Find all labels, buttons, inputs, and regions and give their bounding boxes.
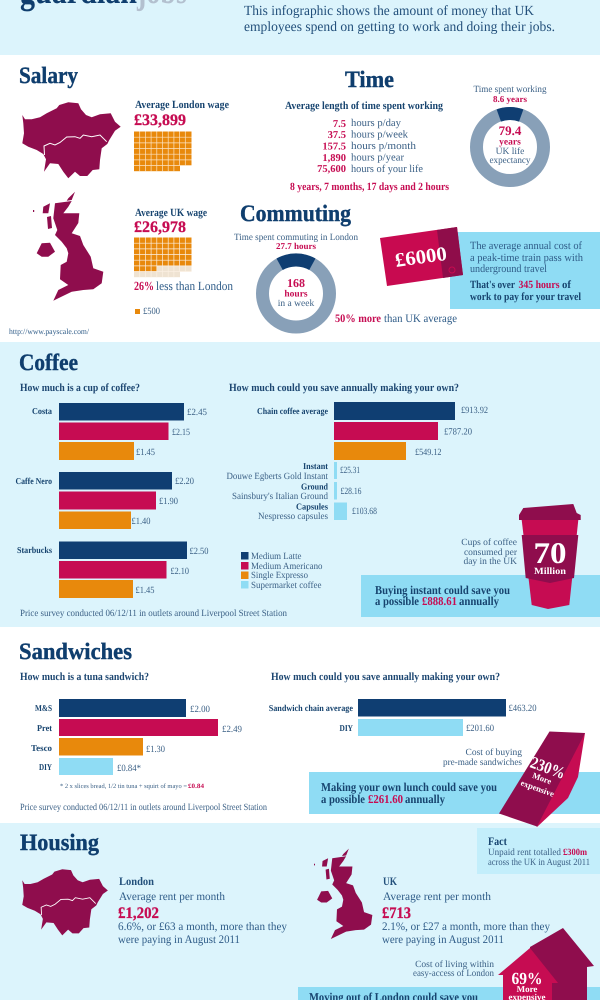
- panel: coffee: [0, 342, 600, 627]
- label: time spent working: [474, 85, 547, 104]
- bar chart: coffee prices: £2.15: [172, 428, 190, 438]
- label: time spent commuting: 27.7 hours: [276, 241, 316, 251]
- bar chart: annual coffee savings: £787.20: [444, 428, 472, 438]
- bar chart: coffee prices: Costa: [32, 406, 52, 416]
- label: cost of living: Cost of living within: [415, 960, 494, 970]
- icon: coffee cup: Million: [534, 567, 567, 577]
- bar chart: sandwich prices: DIY: [39, 762, 52, 772]
- callout: instant saving: a possible: [375, 594, 420, 608]
- label: pre-made sandwiches: Cost of buying: [466, 748, 522, 758]
- source link: http://www.payscale.com/: [9, 327, 90, 336]
- list: working hours: 1,890: [322, 153, 346, 164]
- map: London: [22, 102, 121, 178]
- label: cost of living: easy-access of London: [413, 969, 494, 979]
- bar chart: sandwich prices: M&S: [35, 703, 52, 713]
- bar chart: annual coffee savings: Instant: [303, 461, 328, 471]
- list: working hours: 157.5: [322, 142, 346, 152]
- map: UK rent: [314, 849, 372, 939]
- panel: time: [285, 67, 547, 193]
- callout: train pass cost: a peak-time train pass with: [470, 252, 583, 264]
- bar chart: coffee prices: £2.50: [190, 547, 209, 557]
- bar chart: coffee prices: £2.10: [170, 567, 189, 577]
- text: UK rent: were paying in August 2011: [382, 934, 504, 946]
- bar chart: sandwich prices: £0.84*: [117, 764, 141, 774]
- callout: train pass cost: of: [562, 279, 571, 291]
- bar chart: annual sandwich savings: DIY: [340, 723, 353, 733]
- icon: house: 69%: [512, 969, 542, 988]
- bar chart: annual sandwich savings: [269, 699, 537, 736]
- legend: coffee types: Medium Americano: [251, 562, 323, 572]
- label: time spent commuting: Time spent commuting in London: [234, 233, 358, 243]
- callout: lunch saving: annually: [405, 792, 445, 806]
- bar chart: coffee prices: [16, 403, 209, 598]
- list: working hours: 37.5: [328, 130, 346, 141]
- subheading: Average length of time spent working: [285, 100, 443, 112]
- legend: £500 square: [135, 307, 160, 317]
- bar chart: annual coffee savings: £913.92: [461, 406, 488, 416]
- text: UK rent: UK: [383, 876, 397, 888]
- donut chart: commuting hours: [262, 253, 330, 327]
- total working time: 8 years, 7 months, 17 days and 2 hours: [290, 181, 450, 193]
- bar chart: annual coffee savings: £28.16: [340, 487, 362, 497]
- donut chart: commuting hours: 168: [287, 276, 305, 290]
- heading: sandwiches: Sandwiches: [19, 639, 132, 665]
- text: London rent: [118, 876, 287, 946]
- callout: train pass cost: [450, 232, 600, 309]
- icon: sandwich wedge: [499, 732, 585, 827]
- callout: lunch saving: Making your own lunch could save you: [321, 780, 497, 794]
- callout: instant saving: £888.61: [422, 594, 457, 608]
- label: time spent commuting: [234, 233, 358, 251]
- bar chart: annual sandwich savings: £463.20: [508, 704, 537, 714]
- legend: £500 square: £500: [143, 307, 160, 317]
- text: London rent: Average rent per month: [119, 891, 225, 903]
- list: working hours: hours p/day: [351, 118, 402, 129]
- heading: housing: Housing: [20, 830, 99, 856]
- panel: sandwiches: [19, 639, 600, 814]
- callout: unpaid rent fact: [477, 828, 600, 874]
- callout: instant saving: annually: [459, 594, 499, 608]
- comparison: 50% more: than UK average: [384, 313, 457, 325]
- bar chart: sandwich prices: Pret: [37, 723, 52, 733]
- legend: coffee types: Single Expresso: [251, 571, 308, 581]
- bar chart: coffee prices: £1.90: [159, 497, 178, 507]
- bar chart: coffee prices: Starbucks: [17, 545, 52, 555]
- legend: coffee types: [241, 552, 323, 591]
- text: UK rent: Average rent per month: [383, 891, 491, 903]
- icon: sandwich wedge: expensive: [519, 778, 556, 799]
- legend: coffee types: Supermarket coffee: [251, 581, 322, 591]
- comparison: 26% less than London: less than London: [156, 279, 234, 293]
- callout: train pass cost: underground travel: [470, 263, 547, 275]
- heading: salary: Salary: [19, 63, 78, 89]
- bar chart: annual coffee savings: £25.31: [340, 466, 360, 476]
- callout: unpaid rent fact: Fact: [488, 836, 507, 848]
- text: UK rent: £713: [382, 905, 411, 922]
- figure: London wage: £33,899: [134, 112, 186, 129]
- text: London rent: London: [119, 876, 155, 888]
- note: sandwich price survey: Price survey conducted 06/12/11 in outlets around Liverpool Street Station: [20, 803, 267, 813]
- bar chart: annual coffee savings: Sainsbury's Italian Ground: [232, 492, 328, 502]
- bar chart: sandwich prices: £2.00: [190, 705, 210, 715]
- footnote: DIY sandwich: £0.84: [188, 783, 205, 790]
- label: time spent working: Time spent working: [474, 85, 547, 95]
- list: working hours: hours p/week: [351, 130, 409, 140]
- panel: header: [0, 0, 600, 55]
- bar chart: annual coffee savings: Nespresso capsules: [258, 512, 328, 522]
- intro text: [244, 4, 555, 35]
- bar chart: sandwich prices: Tesco: [31, 743, 52, 753]
- intro text: employees spend on getting to work and doing their jobs.: [244, 20, 555, 35]
- bar chart: annual coffee savings: Ground: [301, 482, 328, 492]
- icon: travel card: £6000: [394, 243, 448, 272]
- callout: lunch saving: a possible: [321, 792, 366, 806]
- bar chart: annual coffee savings: £103.68: [352, 507, 377, 517]
- icon: travel card: [380, 227, 463, 286]
- bar chart: coffee prices: Caffe Nero: [16, 476, 52, 486]
- subheading: sandwich price: How much is a tuna sandwich?: [20, 671, 149, 683]
- bar chart: coffee prices: £2.20: [175, 477, 194, 487]
- list: working hours: hours of your life: [351, 164, 423, 175]
- label: average UK wage: Average UK wage: [135, 207, 207, 219]
- bar chart: coffee prices: £2.45: [187, 408, 207, 418]
- list: working hours: 7.5: [333, 119, 346, 130]
- subheading: sandwich saving: How much could you save annually making your own?: [271, 671, 500, 683]
- donut chart: life expectancy: [476, 107, 544, 180]
- text: London rent: £1,202: [118, 905, 159, 922]
- label: average London wage: Average London wage: [135, 99, 229, 111]
- waffle chart: London wage: [134, 132, 192, 171]
- label: pre-made sandwiches: [443, 748, 522, 768]
- label: pre-made sandwiches: pre-made sandwiches: [443, 758, 522, 768]
- icon: house: [498, 928, 594, 1000]
- callout: train pass cost: The average annual cost of: [470, 240, 582, 252]
- list: working hours: hours p/year: [351, 152, 405, 164]
- panel: housing: [0, 823, 600, 1000]
- heading: time: Time: [345, 67, 394, 93]
- footnote: DIY sandwich: * 2 x slices bread, 1/2 tin tuna + squirt of mayo =: [60, 783, 187, 790]
- bar chart: sandwich prices: £2.49: [222, 725, 242, 735]
- label: cups of coffee: [461, 538, 518, 567]
- donut chart: life expectancy: 79.4: [499, 123, 522, 138]
- intro text: This infographic shows the amount of money that UK: [244, 4, 534, 19]
- subheading: annual saving: How much could you save annually making your own?: [229, 382, 459, 394]
- callout: unpaid rent fact: £300m: [563, 848, 587, 858]
- icon: house: More: [517, 984, 537, 994]
- figure: UK wage: £26,978: [134, 219, 186, 236]
- comparison: 50% more: [335, 313, 457, 325]
- bar chart: annual coffee savings: Douwe Egberts Gold Instant: [226, 472, 328, 482]
- text: UK rent: [382, 876, 550, 946]
- label: cost of living: [413, 960, 494, 979]
- donut chart: commuting hours: in a week: [278, 299, 314, 309]
- bar chart: annual coffee savings: Capsules: [296, 502, 328, 512]
- bar chart: annual coffee savings: £549.12: [415, 448, 442, 458]
- map: London rent: [22, 869, 108, 935]
- icon: coffee cup: 70: [534, 537, 566, 570]
- icon: sandwich wedge: 230%: [528, 753, 568, 783]
- callout: moving out saving: [298, 987, 600, 1000]
- bar chart: sandwich prices: £1.30: [146, 745, 165, 755]
- bar chart: sandwich prices: [31, 699, 242, 775]
- icon: coffee cup: [519, 504, 581, 609]
- bar chart: annual sandwich savings: Sandwich chain average: [269, 703, 353, 713]
- bar chart: annual sandwich savings: £201.60: [466, 724, 494, 734]
- bar chart: coffee prices: £1.45: [136, 448, 155, 458]
- donut chart: commuting hours: hours: [284, 290, 308, 300]
- comparison: 26% less than London: 26%: [134, 279, 154, 293]
- callout: train pass cost: work to pay for your travel: [470, 291, 581, 303]
- label: cups of coffee: consumed per: [464, 548, 518, 558]
- donut chart: life expectancy: UK life: [496, 147, 524, 157]
- callout: lunch saving: £261.60: [368, 792, 403, 806]
- text: London rent: 6.6%, or £63 a month, more than they: [118, 921, 287, 933]
- donut chart: life expectancy: years: [499, 138, 521, 148]
- panel: salary: [9, 63, 234, 336]
- legend: coffee types: Medium Latte: [251, 552, 302, 562]
- waffle chart: UK wage: [134, 238, 192, 277]
- callout: train pass cost: That's over: [470, 279, 515, 291]
- text: London rent: were paying in August 2011: [118, 934, 240, 946]
- label: time spent working: 8.6 years: [493, 94, 527, 104]
- text: UK rent: 2.1%, or £27 a month, more than they: [382, 921, 550, 933]
- callout: train pass cost: 345 hours: [518, 279, 560, 291]
- note: price survey: Price survey conducted 06/12/11 in outlets around Liverpool Street Station: [20, 609, 287, 619]
- list: working hours: [317, 118, 423, 175]
- bar chart: coffee prices: £1.45: [136, 586, 155, 596]
- comparison: 50% more: 50% more: [335, 313, 381, 325]
- heading: coffee: Coffee: [19, 350, 78, 376]
- donut chart: life expectancy: expectancy: [490, 156, 531, 166]
- heading: commuting: Commuting: [240, 201, 351, 227]
- callout: unpaid rent fact: across the UK in August 2011: [488, 858, 590, 868]
- bar chart: annual coffee savings: Chain coffee average: [257, 406, 328, 416]
- bar chart: annual coffee savings: [226, 402, 488, 522]
- callout: instant saving: Buying instant could save you: [375, 583, 510, 597]
- label: cups of coffee: day in the UK: [463, 557, 517, 567]
- callout: instant saving: [361, 575, 600, 617]
- icon: sandwich wedge: More: [531, 770, 553, 786]
- map: UK: [33, 192, 103, 301]
- list: working hours: 75,600: [317, 164, 346, 175]
- panel: commuting: [234, 201, 600, 327]
- callout: lunch saving: [309, 772, 600, 814]
- list: working hours: hours p/month: [351, 141, 417, 152]
- label: cups of coffee: Cups of coffee: [461, 538, 517, 548]
- subheading: cup price: How much is a cup of coffee?: [20, 382, 140, 394]
- bar chart: coffee prices: £1.40: [132, 517, 151, 527]
- callout: unpaid rent fact: Unpaid rent totalled: [488, 848, 561, 858]
